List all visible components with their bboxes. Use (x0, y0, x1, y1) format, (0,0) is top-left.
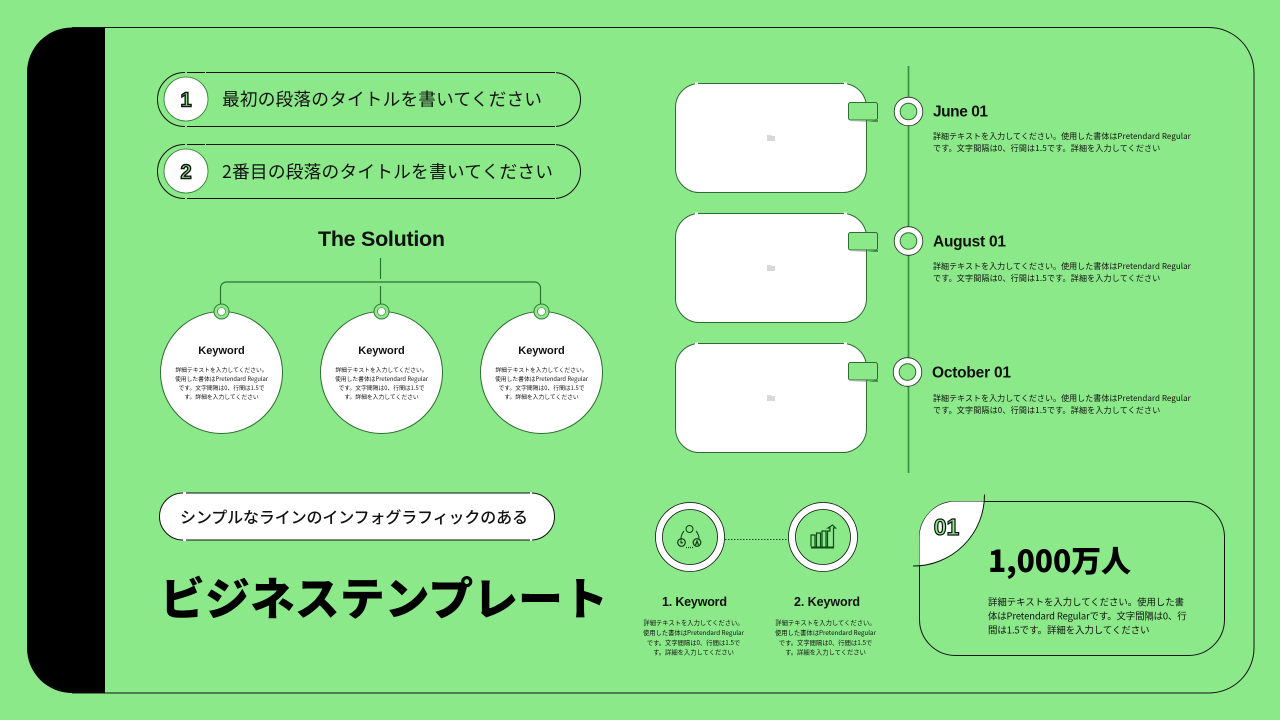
icon: image placeholder (767, 265, 775, 271)
keyword circle 2: 使用した書体はPretendard Regular (335, 374, 429, 383)
keyword circle 3: です。文字間隔は0、行間は1.5で (498, 383, 585, 392)
subtitle pill (160, 493, 554, 540)
timeline entry: October 01: です。文字間隔は0、行間は1.5です。詳細を入力してください (933, 405, 1160, 416)
keyword circle 2 (320, 304, 442, 434)
timeline entry: October 01 (893, 358, 1192, 416)
keyword circle 3: 使用した書体はPretendard Regular (495, 374, 589, 383)
timeline entry: June 01: です。文字間隔は0、行間は1.5です。詳細を入力してください (933, 143, 1160, 154)
timeline entry: August 01 (894, 227, 1192, 284)
keyword circle 2: です。文字間隔は0、行間は1.5で (338, 383, 425, 392)
timeline entry: August 01: August 01 (933, 234, 1006, 250)
icon: image placeholder (767, 395, 775, 401)
pill heading 1: 最初の段落のタイトルを書いてください (222, 86, 542, 112)
image card 3 (676, 344, 878, 452)
icon: rising bar chart (811, 525, 836, 548)
main title: ビジネステンプレート (160, 563, 608, 628)
keyword circle 2: 詳細テキストを入力してください。 (335, 365, 428, 374)
step 1 text: 使用した書体はPretendard Regular (643, 628, 745, 637)
step 2 text: 詳細テキストを入力してください。 (775, 618, 876, 627)
org connector lines (220, 258, 540, 305)
keyword circle 1: 使用した書体はPretendard Regular (175, 374, 269, 383)
heading: The Solution: The Solution (318, 227, 445, 251)
number badge 2 (164, 149, 208, 193)
step 1 text: です。文字間隔は0、行間は1.5で (647, 638, 740, 647)
step 2 text: です。文字間隔は0、行間は1.5で (779, 638, 872, 647)
timeline entry: August 01: です。文字間隔は0、行間は1.5です。詳細を入力してください (933, 273, 1160, 284)
stat card: 間は1.5です。詳細を入力してください (988, 622, 1150, 636)
timeline entry: June 01: June 01 (933, 104, 988, 120)
stat card: 1,000万人 (988, 537, 1131, 581)
keyword circle 3: す。詳細を入力してください (504, 392, 579, 401)
keyword circle 1: す。詳細を入力してください (184, 392, 259, 401)
keyword circle 2: Keyword (358, 345, 405, 357)
icon: image placeholder (767, 135, 775, 141)
card corner tag with 01: 01 (934, 514, 959, 540)
stat card (913, 494, 1224, 656)
step 1 text: す。詳細を入力してください (653, 648, 734, 656)
step 1 text (643, 595, 745, 656)
keyword circle 1 (160, 304, 282, 434)
pill heading 2: 2番目の段落のタイトルを書いてください (222, 158, 553, 184)
keyword circle 3 (480, 304, 602, 434)
icon circle 2 (788, 502, 858, 572)
stat card: 体はPretendard Regularです。文字間隔は0、行 (988, 608, 1187, 622)
keyword circle 1: です。文字間隔は0、行間は1.5で (178, 383, 265, 392)
timeline entry: June 01: 詳細テキストを入力してください。使用した書体はPretendard Regular (933, 131, 1192, 142)
card corner tag with 01 (913, 494, 985, 566)
number badge 1: 1 (180, 90, 192, 112)
step 2 text: 使用した書体はPretendard Regular (775, 628, 877, 637)
pill heading 1 (158, 72, 580, 126)
keyword circle 1: Keyword (198, 345, 245, 357)
timeline entry: June 01 (894, 97, 1192, 154)
dotted connector between icons (725, 538, 788, 540)
number badge 1 (164, 77, 208, 121)
icon circle 1 (656, 502, 724, 572)
timeline entry: October 01: October 01 (932, 364, 1011, 382)
keyword circle 3: 詳細テキストを入力してください。 (495, 365, 588, 374)
image card 2 (676, 214, 878, 322)
pill heading 2 (158, 144, 580, 198)
icon: cycle of three nodes (678, 526, 701, 548)
number badge 2: 2 (180, 162, 192, 184)
subtitle pill: シンプルなラインのインフォグラフィックのある (180, 504, 528, 528)
step 2 text: す。詳細を入力してください (785, 648, 866, 656)
step 2 text: 2. Keyword (794, 595, 860, 609)
step 2 text (775, 595, 877, 656)
image card 1 (676, 84, 878, 192)
keyword circle 3: Keyword (518, 345, 565, 357)
timeline entry: October 01: 詳細テキストを入力してください。使用した書体はPretendard Regular (933, 393, 1192, 404)
step 1 text: 詳細テキストを入力してください。 (643, 618, 744, 627)
keyword circle 2: す。詳細を入力してください (344, 392, 419, 401)
timeline axis (908, 66, 910, 473)
stat card: 詳細テキストを入力してください。使用した書 (988, 594, 1184, 608)
timeline entry: August 01: 詳細テキストを入力してください。使用した書体はPretendard Regular (933, 261, 1192, 272)
step 1 text: 1. Keyword (662, 595, 727, 609)
keyword circle 1: 詳細テキストを入力してください。 (175, 365, 268, 374)
